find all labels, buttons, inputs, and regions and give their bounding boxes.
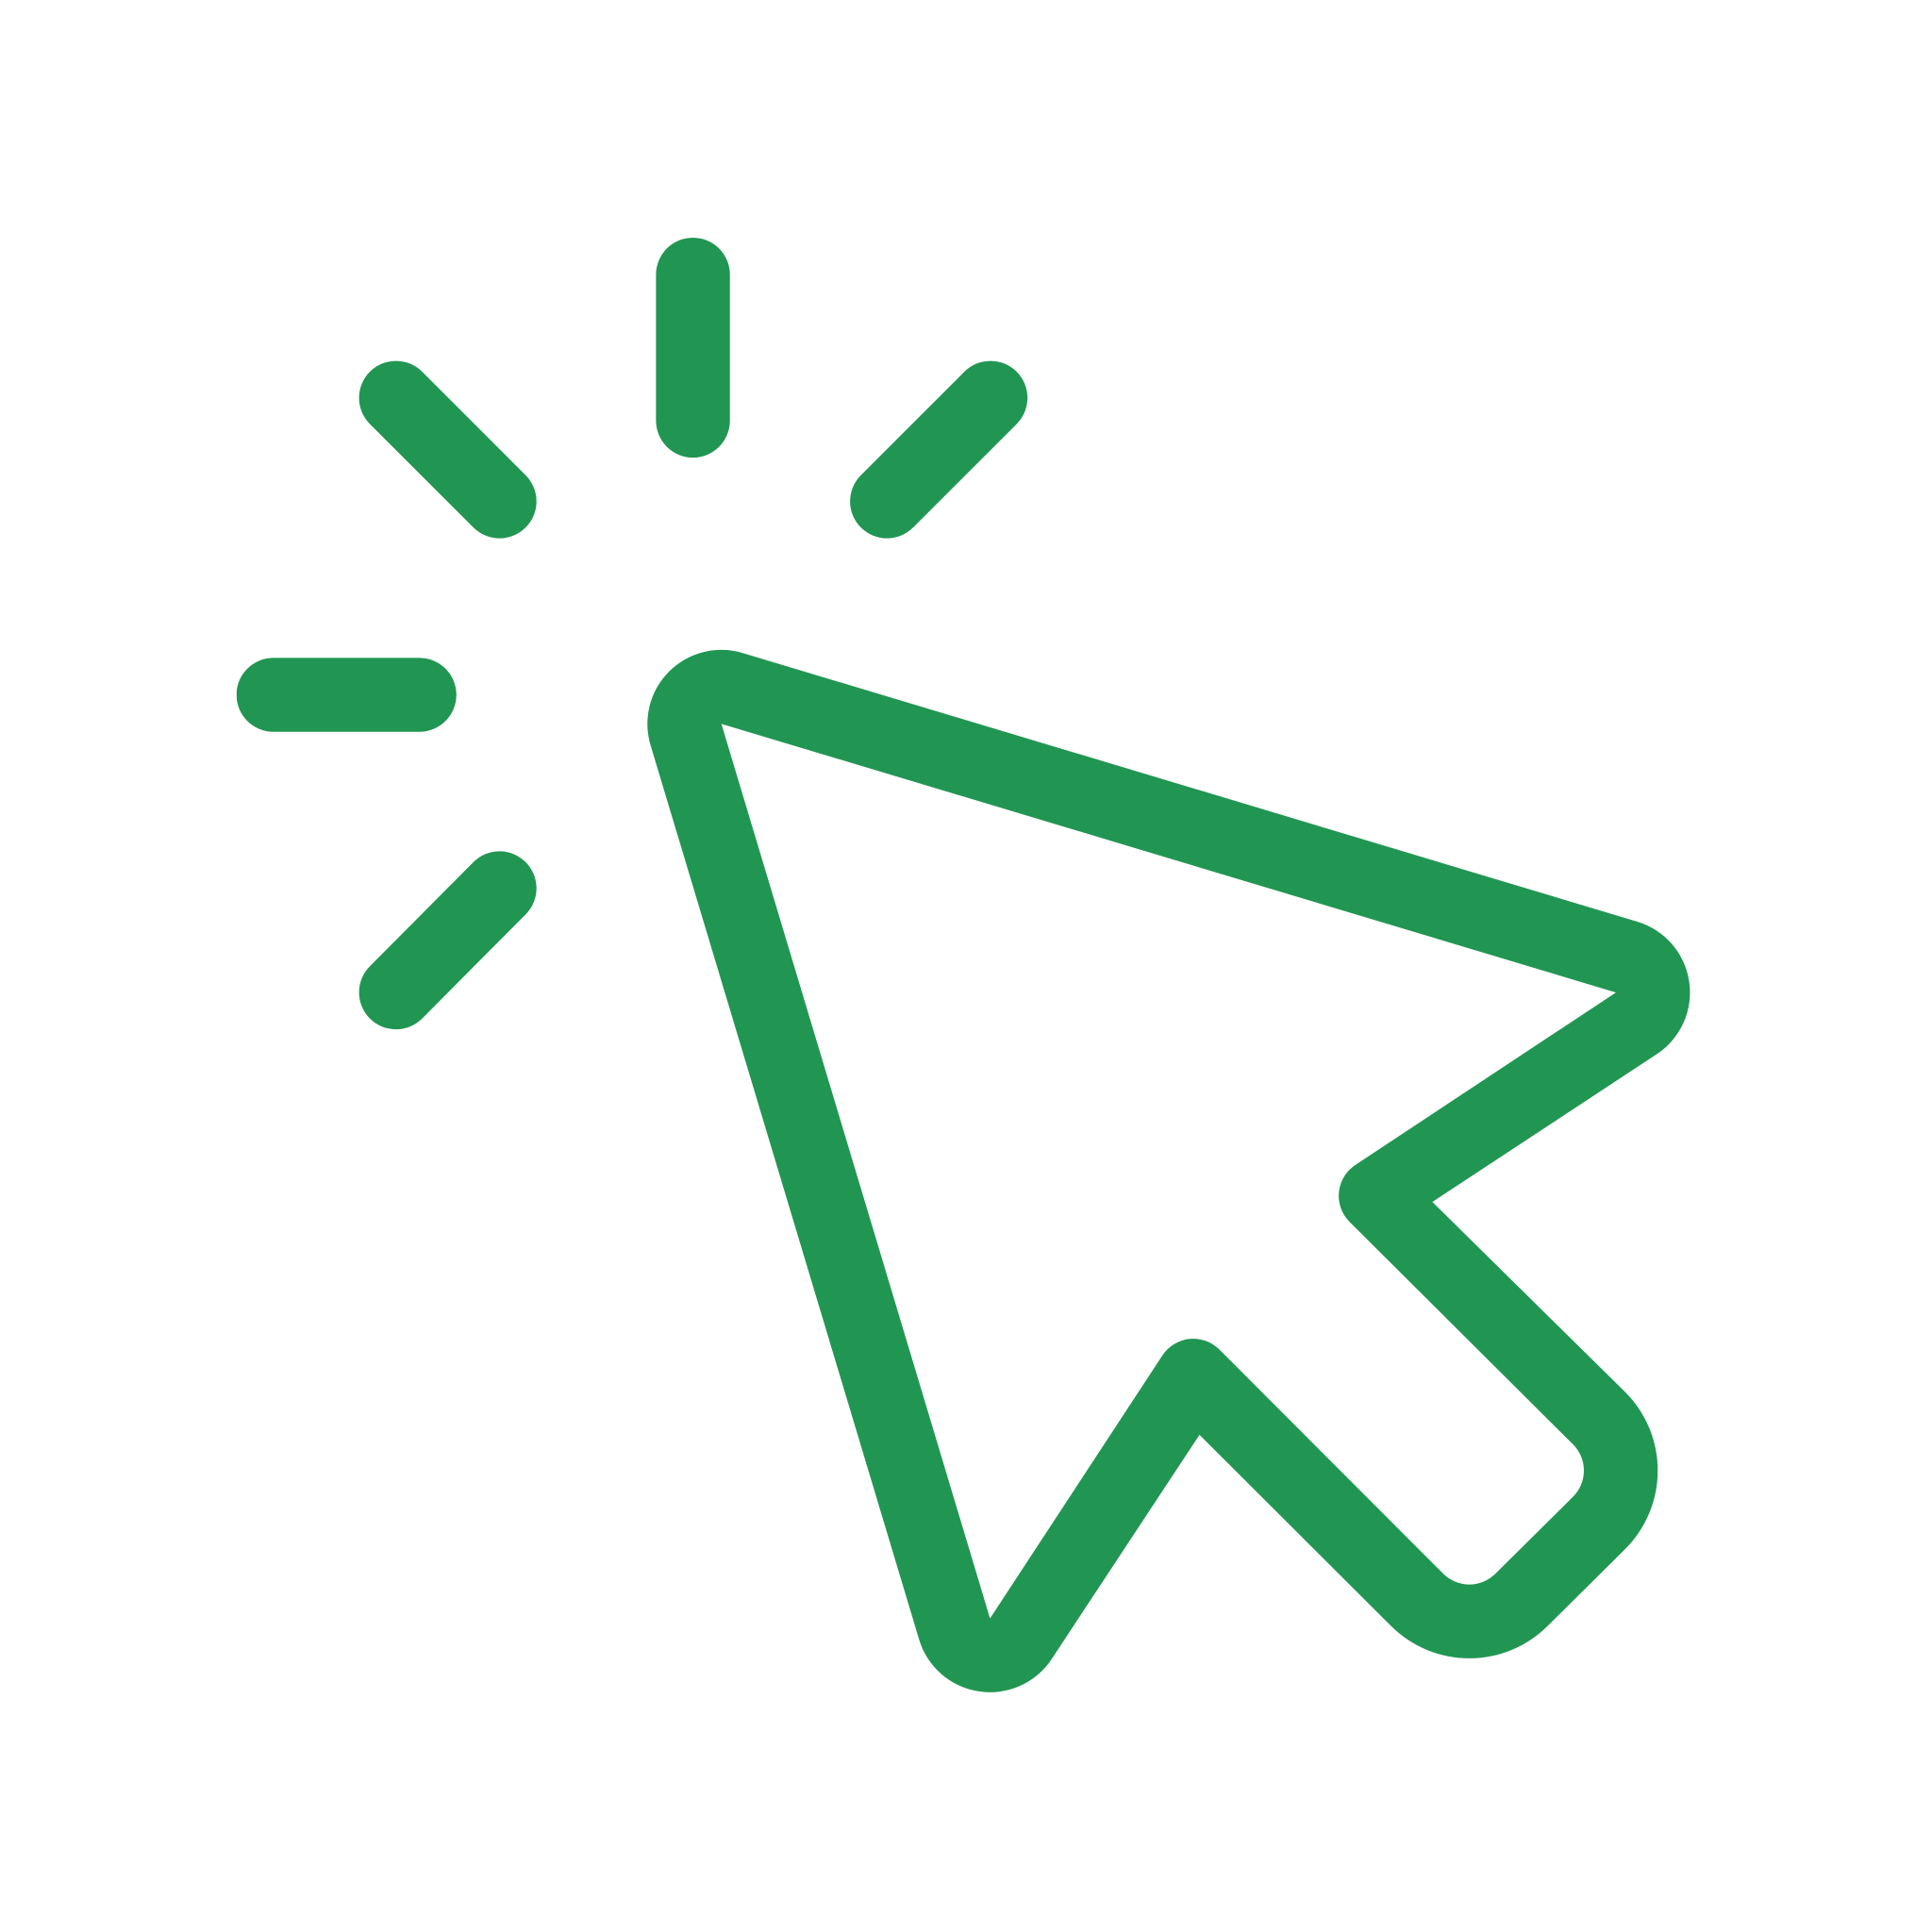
ray: top (665, 275, 722, 421)
cursor arrow outline (647, 650, 1690, 1692)
ray: lower left (396, 889, 500, 992)
icon: cursor click (236, 238, 1690, 1692)
ray: upper left (396, 398, 500, 501)
click rays (274, 275, 991, 992)
ray: upper right (887, 398, 991, 501)
ray: left (274, 667, 420, 724)
